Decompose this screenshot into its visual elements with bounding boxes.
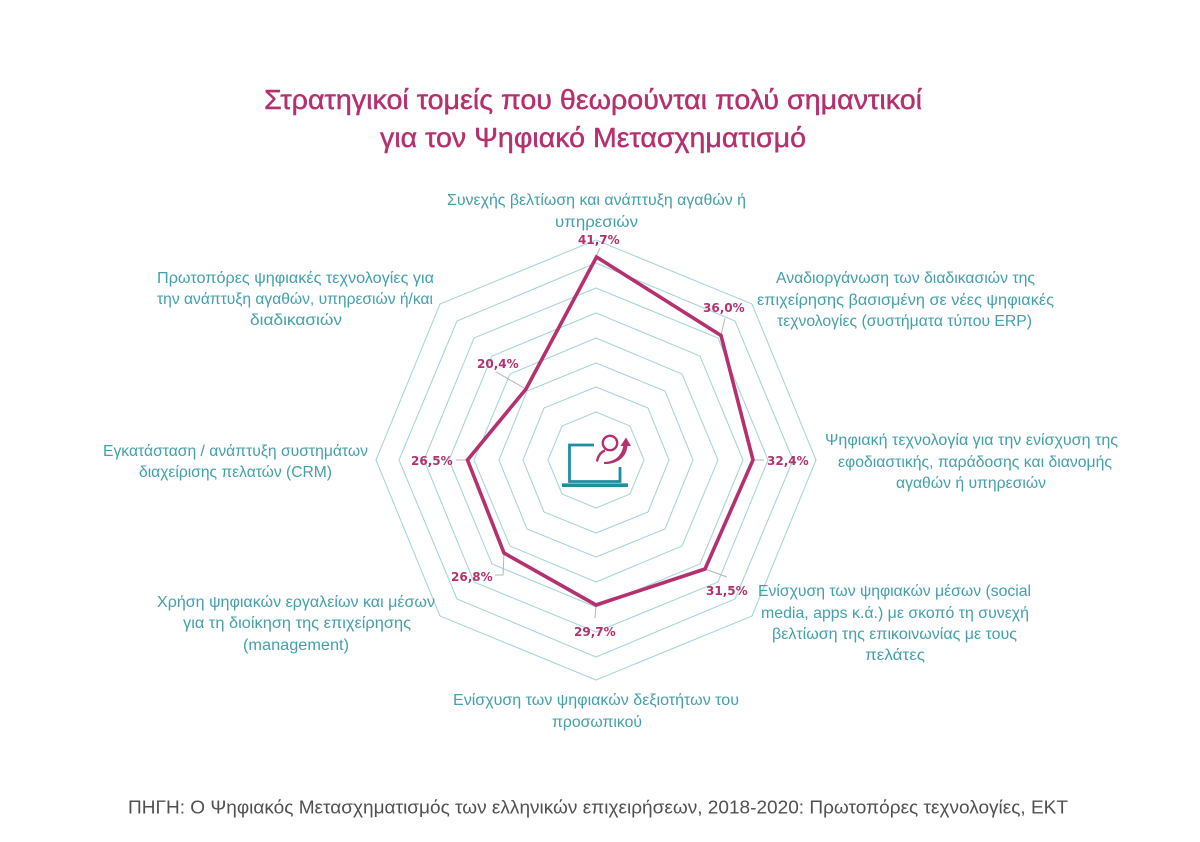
label: management tools: (management)	[243, 637, 349, 654]
value labels: 20,4%	[477, 357, 519, 371]
label: pioneering technologies: την ανάπτυξη αγαθών, υπηρεσιών ή/και	[157, 291, 433, 308]
label: process reorganisation: Αναδιοργάνωση των διαδικασιών της	[776, 270, 1035, 287]
label: continuous improvement: υπηρεσιών	[555, 214, 638, 231]
title: Στρατηγικοί τομείς που θεωρούνται πολύ σημαντικοί	[264, 84, 922, 115]
label: digital media: βελτίωση της επικοινωνίας με τους	[772, 626, 1017, 643]
source note: ΠΗΓΗ: Ο Ψηφιακός Μετασχηματισμός των ελληνικών επιχειρήσεων, 2018-2020: Πρωτοπόρες τεχνολογίες, ΕΚΤ	[128, 798, 1068, 818]
label: CRM: διαχείρισης πελατών (CRM)	[139, 464, 332, 481]
label: continuous improvement	[447, 192, 746, 231]
leader lines	[456, 248, 764, 618]
label: continuous improvement: Συνεχής βελτίωση και ανάπτυξη αγαθών ή	[447, 192, 746, 209]
radar chart	[376, 233, 816, 680]
value labels	[411, 233, 809, 639]
label: logistics: Ψηφιακή τεχνολογία για την ενίσχυση της	[825, 432, 1118, 449]
label: staff skills: Ενίσχυση των ψηφιακών δεξιοτήτων του	[453, 692, 739, 709]
label: digital media: πελάτες	[865, 647, 925, 664]
label: logistics: αγαθών ή υπηρεσιών	[896, 475, 1046, 492]
label: process reorganisation: επιχείρησης βασισμένη σε νέες ψηφιακές	[757, 292, 1054, 309]
label: pioneering technologies: Πρωτοπόρες ψηφιακές τεχνολογίες για	[157, 270, 434, 287]
label: staff skills	[453, 692, 739, 731]
label: logistics	[825, 432, 1118, 492]
label: pioneering technologies	[157, 270, 434, 329]
label: digital media: media, apps κ.ά.) με σκοπό τη συνεχή	[761, 605, 1029, 622]
label: logistics: εφοδιαστικής, παράδοσης και διανομής	[838, 454, 1112, 471]
value labels: 26,5%	[411, 454, 453, 468]
label: staff skills: προσωπικού	[552, 714, 642, 731]
value labels: 31,5%	[706, 584, 748, 598]
title: για τον Ψηφιακό Μετασχηματισμό	[380, 122, 806, 153]
value labels: 26,8%	[451, 570, 493, 584]
label: CRM: Εγκατάσταση / ανάπτυξη συστημάτων	[103, 443, 368, 460]
label: management tools	[157, 594, 435, 654]
label: process reorganisation	[757, 270, 1054, 330]
value labels: 36,0%	[703, 301, 745, 315]
icon: laptop with person and arrow	[562, 436, 631, 485]
label: pioneering technologies: διαδικασιών	[250, 312, 342, 329]
value labels: 41,7%	[578, 233, 620, 247]
label: CRM	[103, 443, 368, 481]
label: management tools: για τη διοίκηση της επιχείρησης	[183, 615, 411, 632]
label: process reorganisation: τεχνολογίες (συστήματα τύπου ERP)	[777, 313, 1032, 330]
value labels: 29,7%	[574, 625, 616, 639]
radar grid rings	[376, 240, 816, 680]
label: digital media	[758, 583, 1031, 664]
label: digital media: Ενίσχυση των ψηφιακών μέσων (social	[758, 583, 1031, 600]
title	[264, 84, 922, 153]
value labels: 32,4%	[767, 454, 809, 468]
data polygon	[468, 257, 753, 605]
label: management tools: Χρήση ψηφιακών εργαλείων και μέσων	[157, 594, 435, 611]
